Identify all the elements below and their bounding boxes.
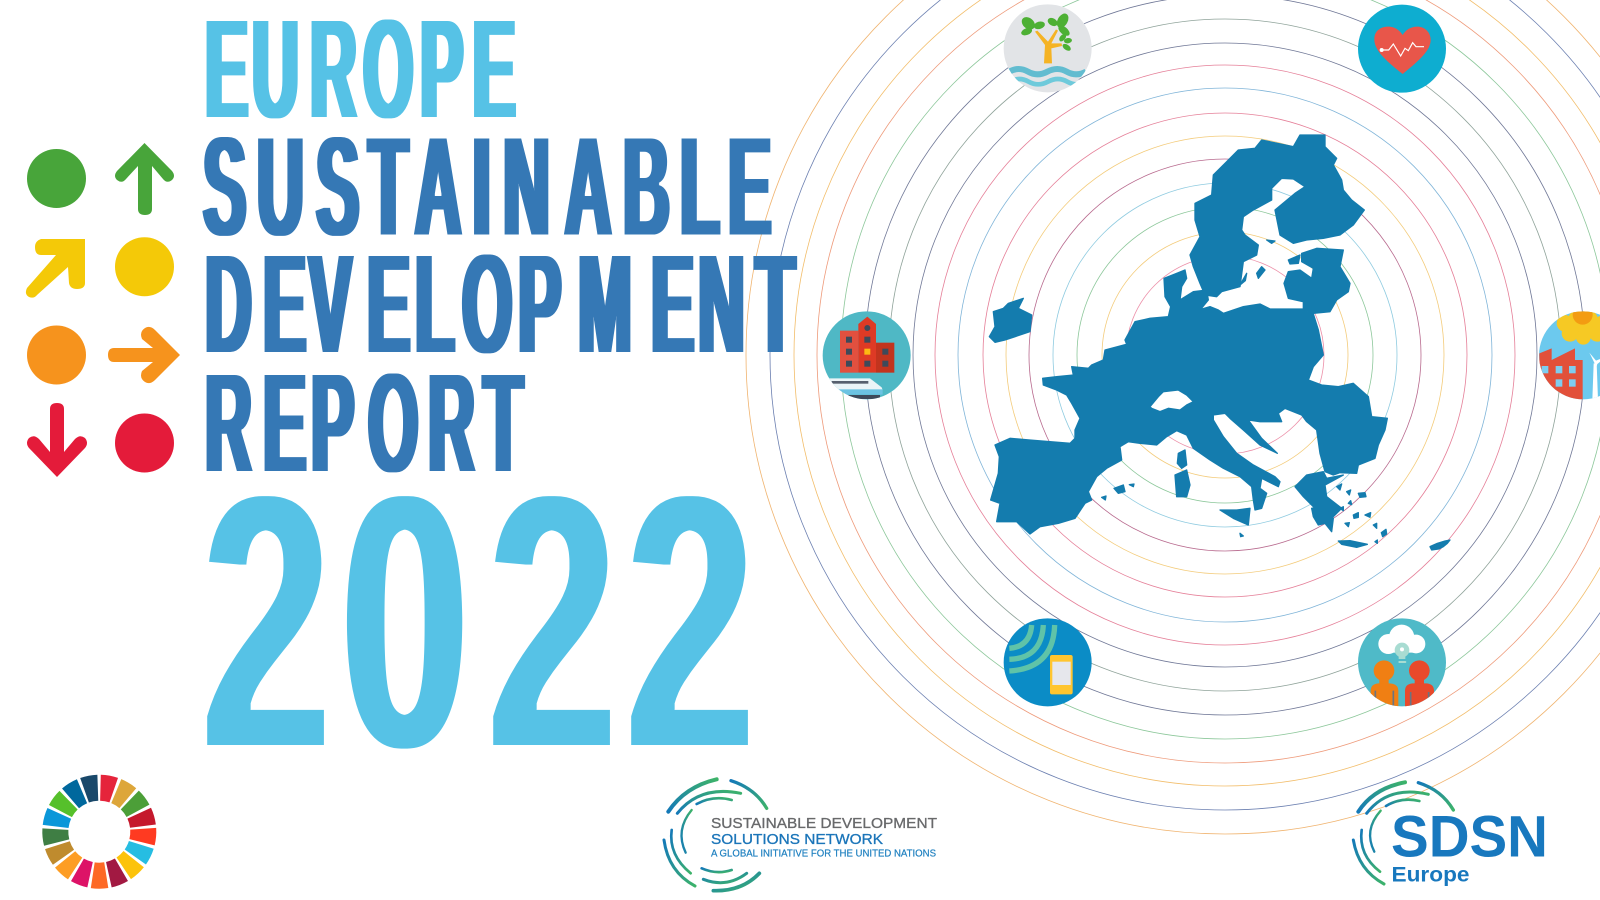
logo text line 1: SUSTAINABLE DEVELOPMENT (711, 816, 937, 832)
logo text line 2: SOLUTIONS NETWORK (711, 832, 883, 848)
logo: SDSN Europe (1353, 782, 1548, 887)
logo text SDSN: SDSN (1391, 805, 1548, 870)
icon: heart (1358, 5, 1446, 93)
icon: sun, factory and wind turbine (1539, 305, 1600, 400)
Greece (1295, 472, 1343, 532)
icon: people and cloud idea (1358, 618, 1446, 710)
logo swirl (1353, 782, 1453, 884)
orange dot (27, 326, 86, 384)
Baltic states (1284, 248, 1350, 313)
logo text Europe: Europe (1392, 864, 1470, 887)
red dot (115, 414, 174, 472)
concentric rings (746, 0, 1600, 834)
red down arrow (27, 403, 87, 477)
Mediterranean islands (1102, 240, 1387, 547)
orange right arrow (108, 327, 180, 383)
mainland Europe (991, 270, 1387, 534)
icon: buildings and train (823, 311, 911, 399)
SDG wheel (37, 769, 162, 894)
logo text line 3: A GLOBAL INITIATIVE FOR THE UNITED NATIONS (711, 849, 936, 860)
yellow diagonal arrow (26, 239, 85, 298)
heading: SUSTAINABLE: SUSTAINABLE (203, 108, 771, 266)
logo swirl (664, 779, 767, 891)
Cyprus (1430, 540, 1450, 550)
green dot (27, 149, 86, 208)
logo: Sustainable Development Solutions Network (664, 779, 937, 891)
map of Europe (989, 135, 1450, 550)
icon: phone and signal (1004, 618, 1092, 706)
yellow dot (115, 237, 174, 296)
year 2022: 2022 (202, 418, 754, 826)
heading: REPORT: REPORT (205, 344, 523, 503)
Scandinavia and Finland (1190, 135, 1364, 297)
title (203, 0, 795, 503)
heading: DEVELOPMENT: DEVELOPMENT (205, 225, 795, 384)
Ireland (989, 298, 1032, 342)
icon: tree and water (1004, 4, 1092, 92)
status symbols: dots and arrows (26, 143, 180, 477)
green up arrow (115, 143, 174, 215)
